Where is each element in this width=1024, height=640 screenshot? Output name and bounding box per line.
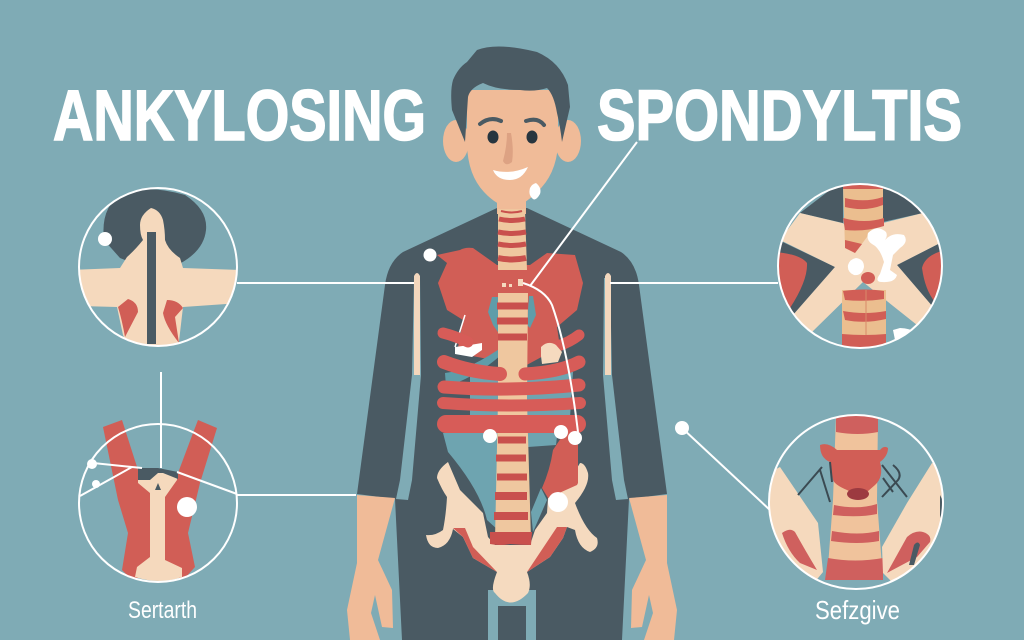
markers	[424, 248, 689, 512]
spine	[490, 209, 532, 545]
head	[443, 46, 581, 214]
figure: person	[347, 46, 689, 640]
circle outline	[79, 424, 237, 582]
inset circle: lower right	[768, 414, 944, 590]
lower white patch	[893, 328, 910, 339]
pelvis	[426, 462, 598, 602]
smile	[493, 167, 528, 180]
dark joint	[138, 468, 178, 490]
ears	[443, 120, 469, 162]
white lesion	[848, 228, 906, 282]
right hand	[629, 495, 677, 640]
circle outline	[79, 188, 237, 346]
small cream dots	[502, 279, 523, 287]
nose	[503, 133, 513, 164]
cream bone	[135, 473, 182, 581]
teal stroke across lung	[445, 345, 505, 387]
left hand	[347, 495, 395, 640]
inset circle: upper right	[770, 180, 950, 350]
spine stripes	[842, 185, 886, 348]
small cream detail on organ	[541, 343, 562, 364]
connector lines	[161, 283, 778, 511]
dark background	[780, 186, 940, 314]
lower spine	[495, 293, 531, 540]
left limb	[770, 467, 823, 579]
inset circle: lower left	[79, 420, 237, 582]
shoulders and neck	[80, 208, 236, 345]
pelvis red rim	[453, 527, 567, 572]
dark red node	[847, 488, 869, 500]
spine bottom	[842, 290, 886, 335]
face	[467, 90, 558, 207]
pelvis bone	[426, 462, 598, 602]
circle outline	[769, 415, 943, 589]
thin white line on lung	[455, 315, 465, 347]
eyes	[488, 130, 498, 144]
arm gaps	[396, 278, 628, 640]
upper organ	[820, 444, 888, 493]
title: left word: ANKYLOSING	[53, 77, 426, 156]
body: dark garment	[357, 208, 667, 640]
vertebra stripes	[494, 211, 528, 516]
abdomen blue organs	[443, 372, 573, 532]
muscle areas	[118, 299, 183, 343]
red node	[861, 272, 875, 284]
spine column	[828, 418, 882, 560]
dark accents	[909, 495, 945, 565]
chin marker	[529, 183, 540, 199]
caption: lower right: Sefzgive	[815, 595, 900, 625]
neck	[497, 190, 526, 214]
right limb	[882, 463, 942, 580]
curved white connector	[523, 142, 637, 432]
circle outline	[778, 184, 942, 348]
red side muscles	[779, 252, 941, 308]
upper spine	[498, 209, 527, 270]
inset circle: upper left	[70, 188, 240, 350]
nerve strands	[798, 462, 907, 502]
ribs	[443, 333, 580, 424]
left red	[782, 530, 817, 570]
spine base	[490, 532, 532, 545]
markers	[87, 459, 197, 517]
crossing bones	[780, 213, 942, 332]
red limbs	[103, 420, 217, 578]
hair	[451, 46, 570, 142]
spine top	[843, 185, 883, 253]
caption: lower left: Sertarth	[128, 597, 197, 624]
spine stripes	[825, 415, 883, 580]
lower red organ	[542, 432, 578, 498]
spine midline	[866, 290, 867, 335]
arm inner stripes	[414, 273, 611, 375]
lungs and upper torso organs	[437, 248, 583, 367]
marker	[98, 232, 112, 246]
hair mass	[103, 189, 206, 270]
right red	[887, 532, 930, 573]
eyebrows	[480, 119, 544, 125]
white patch on left lung	[455, 343, 482, 357]
teal detail around spine	[488, 296, 536, 335]
spine bar	[147, 232, 156, 344]
leader lines	[80, 463, 237, 496]
